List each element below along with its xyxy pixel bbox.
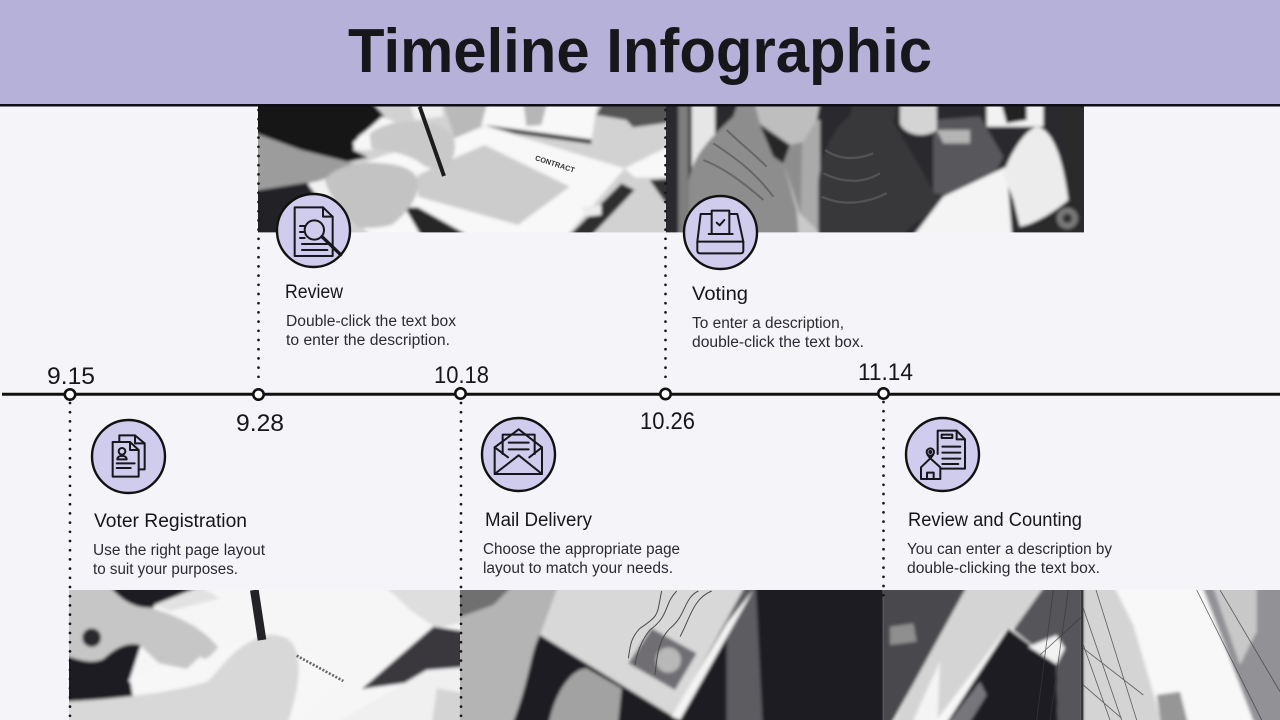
panel: mail delivery <box>482 418 680 577</box>
description <box>907 541 1112 577</box>
description: to enter the description. <box>286 332 450 349</box>
title: Timeline Infographic <box>348 17 932 86</box>
photo: hands filling out a form <box>69 590 460 720</box>
icon: registration documents <box>92 420 165 493</box>
icon: document with location house <box>906 418 979 491</box>
timeline axis <box>2 388 1280 400</box>
heading: Review <box>285 282 343 303</box>
heading: Voter Registration <box>94 511 247 532</box>
description: Use the right page layout <box>93 542 266 559</box>
header band <box>0 0 1280 106</box>
photo: contract signing <box>258 106 666 232</box>
icon: magnified document <box>277 194 350 267</box>
panel: review and counting <box>906 418 1112 577</box>
photo: voters at a polling place <box>666 106 1084 232</box>
date: 10.18: 10.18 <box>434 362 489 389</box>
description: Double-click the text box <box>286 313 456 330</box>
timeline nodes <box>65 388 889 400</box>
photo: contract signing: CONTRACT <box>534 153 576 175</box>
description: To enter a description, <box>692 315 844 332</box>
date: 9.15: 9.15 <box>47 363 95 390</box>
description: to suit your purposes. <box>93 561 238 578</box>
icon: ballot box <box>684 196 757 269</box>
description: Choose the appropriate page <box>483 541 680 558</box>
date: 11.14: 11.14 <box>858 359 913 386</box>
photo: stamped envelope in hand <box>460 590 884 720</box>
photo: glass office buildings <box>883 590 1280 720</box>
panel: voter registration <box>92 420 266 578</box>
description <box>483 541 680 577</box>
description: You can enter a description by <box>907 541 1112 558</box>
panel: voting <box>684 196 864 351</box>
icon: open envelope <box>482 418 555 491</box>
heading: Mail Delivery <box>485 510 592 531</box>
description: double-click the text box. <box>692 334 864 351</box>
description <box>93 542 266 578</box>
description <box>692 315 864 351</box>
date: 10.26: 10.26 <box>640 408 695 435</box>
description <box>286 313 456 349</box>
description: double-clicking the text box. <box>907 560 1100 577</box>
dotted connector lines <box>70 110 884 720</box>
panel: review <box>277 194 456 349</box>
date: 9.28: 9.28 <box>236 410 284 437</box>
heading: Voting <box>692 284 748 305</box>
description: layout to match your needs. <box>483 560 673 577</box>
heading: Review and Counting <box>908 510 1082 531</box>
